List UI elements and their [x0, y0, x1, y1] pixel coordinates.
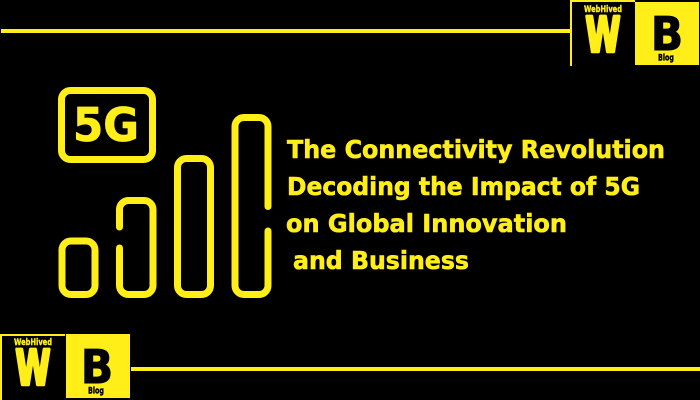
bottom rule line [131, 367, 700, 371]
icon: 5G badge: 5G [73, 98, 139, 152]
logo letter B: B [651, 8, 683, 61]
title [286, 135, 665, 275]
signal bar 4 [235, 118, 268, 294]
logo name: WebHived [14, 338, 52, 348]
title: on Global Innovation [286, 209, 567, 238]
signal bar 2 [120, 200, 153, 294]
logo letter B: B [81, 341, 113, 394]
icon: 5G signal bars [62, 90, 268, 294]
top-right logo [571, 1, 699, 66]
title: Decoding the Impact of 5G [287, 172, 640, 201]
logo yellow square [66, 334, 130, 398]
logo caption: Blog [658, 54, 674, 64]
title: The Connectivity Revolution [287, 135, 665, 164]
signal bar 3 [178, 158, 210, 294]
logo caption: Blog [88, 386, 104, 396]
icon: 5G badge [62, 90, 152, 160]
logo letter W: W [16, 340, 50, 396]
logo outline box [1, 335, 65, 400]
logo yellow square [635, 2, 699, 65]
logo outline box [571, 1, 635, 66]
logo name: WebHived [584, 5, 622, 15]
top rule line [1, 29, 570, 33]
signal bar 1 [62, 241, 95, 294]
logo letter W: W [586, 7, 620, 63]
bottom-left logo [1, 334, 130, 400]
title: and Business [293, 246, 469, 275]
